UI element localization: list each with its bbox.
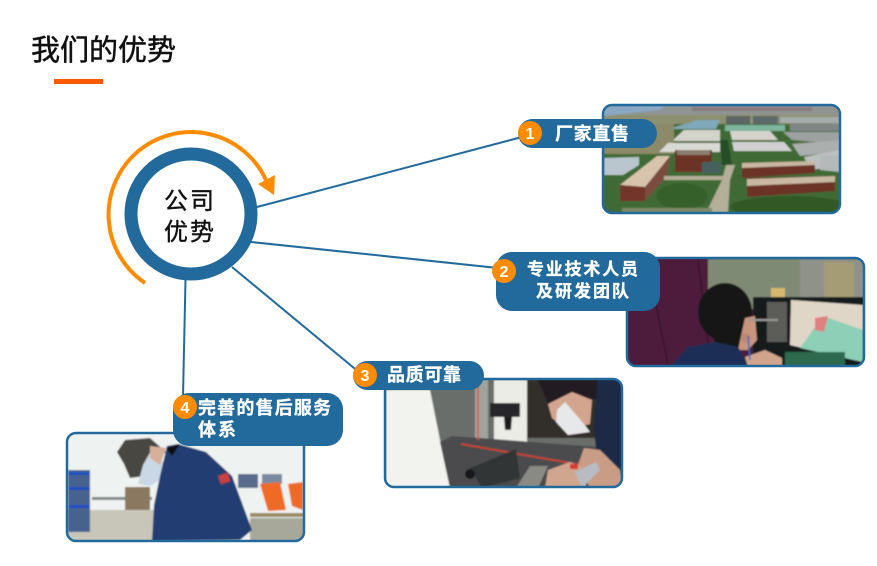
badge 4: 完善的售后服务体系 — [173, 393, 343, 446]
photo 3: quality inspection — [384, 378, 640, 488]
badge 4: 完善的售后服务体系: 完善的售后服务 — [198, 397, 331, 418]
badge 2: 专业技术人员及研发团队: 2 — [500, 264, 509, 281]
badge 4: 完善的售后服务体系: 4 — [181, 400, 190, 417]
badge 2: 专业技术人员及研发团队: 及研发团队 — [536, 281, 629, 301]
badge 2: 专业技术人员及研发团队: 专业技术人员 — [527, 260, 638, 279]
badge 3: 品质可靠: 品质可靠 — [387, 364, 461, 385]
connector lines — [183, 137, 522, 396]
badge 3: 品质可靠 — [353, 361, 484, 390]
title: 我们的优势 — [31, 34, 176, 67]
badge 1: 厂家直售: 1 — [526, 126, 535, 143]
center circle: 公司 — [164, 188, 216, 215]
center circle: 优势 — [164, 219, 216, 246]
badge 2: 专业技术人员及研发团队 — [492, 252, 660, 311]
photo 1: factory aerial view — [602, 104, 850, 218]
photo 4: after-sales technician — [66, 432, 305, 542]
badge 1: 厂家直售: 厂家直售 — [555, 123, 629, 144]
icon: orange rotating arrow — [109, 132, 275, 283]
badge 3: 品质可靠: 3 — [361, 368, 370, 385]
badge 4: 完善的售后服务体系: 体系 — [198, 419, 236, 440]
photo 2: engineer at computer — [626, 257, 865, 367]
center circle — [131, 154, 251, 274]
title underline — [54, 79, 103, 84]
badge 1: 厂家直售 — [518, 119, 657, 148]
